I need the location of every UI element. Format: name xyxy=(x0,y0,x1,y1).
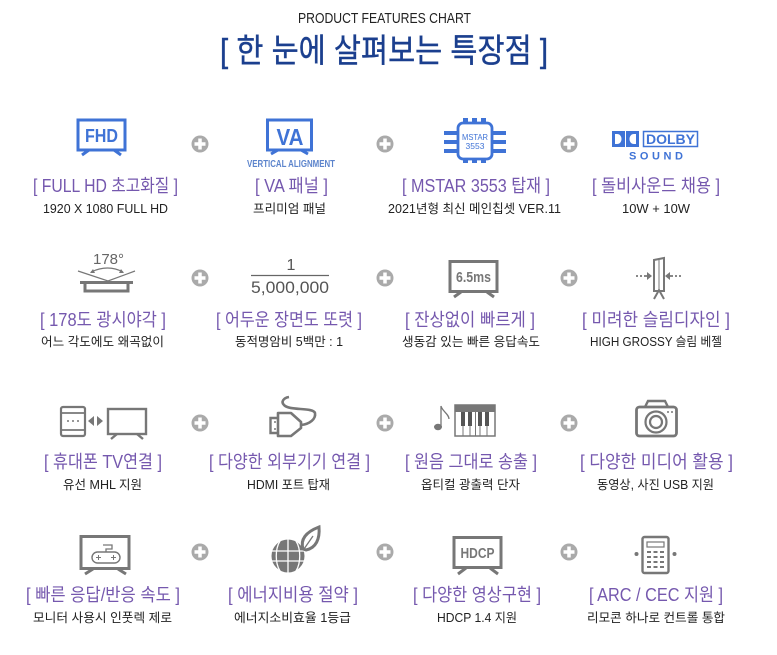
icon: plus xyxy=(560,136,578,152)
heading: [ ARC / CEC 지원 ] xyxy=(589,585,723,605)
icon: FHD TV: FHD xyxy=(85,126,118,146)
icon: plus xyxy=(560,414,578,432)
icon: VA TV: VA xyxy=(276,124,304,150)
description: 에너지소비효율 1등급 xyxy=(234,611,351,625)
icon: globe and leaf xyxy=(272,527,319,573)
heading: [ 미려한 슬림디자인 ] xyxy=(582,310,730,330)
feature: MSTAR xyxy=(388,118,561,216)
feature: HDCP xyxy=(413,538,541,625)
heading: [ 휴대폰 TV연결 ] xyxy=(44,452,162,472)
feature: VA panel xyxy=(247,120,335,216)
icon: gamepad TV xyxy=(81,536,129,574)
icon: contrast fraction: 1 xyxy=(287,257,296,274)
title header xyxy=(220,11,548,69)
feature: response time xyxy=(402,262,540,349)
icon: Dolby logo: DOLBY xyxy=(646,131,696,147)
description: 동영상, 사진 USB 지원 xyxy=(597,478,714,492)
icon: plus xyxy=(192,136,208,152)
icon: Dolby logo: SOUND xyxy=(629,150,683,162)
icon: plus xyxy=(192,414,208,432)
feature: game response xyxy=(26,536,180,625)
heading: [ VA 패널 ] xyxy=(255,176,328,196)
icon: note and piano xyxy=(434,405,495,436)
icon: plus xyxy=(376,136,394,152)
caption: vertical alignment: VERTICAL ALIGNMENT xyxy=(247,159,335,170)
feature: ARC CEC xyxy=(587,537,726,625)
feature: slim design xyxy=(582,258,730,349)
icon: camera xyxy=(636,401,676,436)
icon: plus xyxy=(560,544,578,560)
icon: 6.5ms TV: 6.5ms xyxy=(456,270,491,286)
description: 2021년형 최신 메인칩셋 VER.11 xyxy=(388,202,561,216)
feature: FULL HD xyxy=(33,120,178,216)
icon: viewing angle: 178° xyxy=(93,251,124,268)
description: 모니터 사용시 인풋렉 제로 xyxy=(33,611,172,625)
heading: [ 178도 광시야각 ] xyxy=(40,310,166,330)
feature: 178 viewing angle xyxy=(40,251,166,349)
icon: chip: MSTAR xyxy=(462,133,488,142)
description: 옵티컬 광출력 단자 xyxy=(421,478,520,492)
description: 프리미엄 패널 xyxy=(253,202,326,216)
icon: plus xyxy=(376,544,394,560)
heading: [ 빠른 응답/반응 속도 ] xyxy=(26,585,180,605)
heading: [ 돌비사운드 채용 ] xyxy=(592,176,720,196)
icon: chip xyxy=(444,118,506,163)
description: 유선 MHL 지원 xyxy=(63,478,142,492)
description: HDMI 포트 탑재 xyxy=(247,478,330,492)
feature: media xyxy=(580,401,733,492)
description: 생동감 있는 빠른 응답속도 xyxy=(402,335,540,349)
title header: [ 한 눈에 살펴보는 특장점 ] xyxy=(220,32,548,69)
icon: slim bezel xyxy=(636,258,681,299)
description: 리모콘 하나로 컨트롤 통합 xyxy=(587,611,726,625)
description: 1920 X 1080 FULL HD xyxy=(43,202,168,216)
icon: plus xyxy=(192,544,208,560)
heading: [ 어두운 장면도 또렷 ] xyxy=(216,310,362,330)
heading: [ FULL HD 초고화질 ] xyxy=(33,176,178,196)
heading: [ 다양한 영상구현 ] xyxy=(413,585,541,605)
icon: remote control xyxy=(634,537,676,573)
icon: plus xyxy=(192,270,208,286)
feature: phone to TV xyxy=(44,407,162,492)
feature: external devices xyxy=(209,397,370,492)
feature: optical audio xyxy=(405,405,537,492)
description: 10W + 10W xyxy=(622,202,690,216)
icon: FHD TV xyxy=(78,120,125,155)
icon: Dolby logo xyxy=(612,131,698,162)
icon: plus xyxy=(376,414,394,432)
heading: [ 에너지비용 절약 ] xyxy=(228,585,358,605)
heading: [ 원음 그대로 송출 ] xyxy=(405,452,537,472)
heading: [ 다양한 미디어 활용 ] xyxy=(580,452,733,472)
icon: HDCP TV: HDCP xyxy=(460,546,495,562)
heading: [ MSTAR 3553 탑재 ] xyxy=(402,176,550,196)
icon: contrast fraction: 5,000,000 xyxy=(251,278,329,297)
description: 동적명암비 5백만 : 1 xyxy=(235,335,343,349)
feature: contrast xyxy=(216,257,362,349)
icon: contrast fraction xyxy=(251,257,329,297)
icon: plus xyxy=(560,270,578,286)
feature: Dolby xyxy=(592,131,720,216)
heading: [ 다양한 외부기기 연결 ] xyxy=(209,452,370,472)
icon: phone and TV link xyxy=(61,407,146,439)
icon: plus xyxy=(376,270,394,286)
icon: chip: 3553 xyxy=(466,141,485,151)
description: HIGH GROSSY 슬림 베젤 xyxy=(590,335,722,349)
title header: PRODUCT FEATURES CHART xyxy=(298,11,471,27)
description: 어느 각도에도 왜곡없이 xyxy=(41,335,164,349)
description: HDCP 1.4 지원 xyxy=(437,611,517,625)
heading: [ 잔상없이 빠르게 ] xyxy=(405,310,535,330)
feature: energy xyxy=(228,527,358,625)
icon: HDMI cable xyxy=(270,397,315,436)
